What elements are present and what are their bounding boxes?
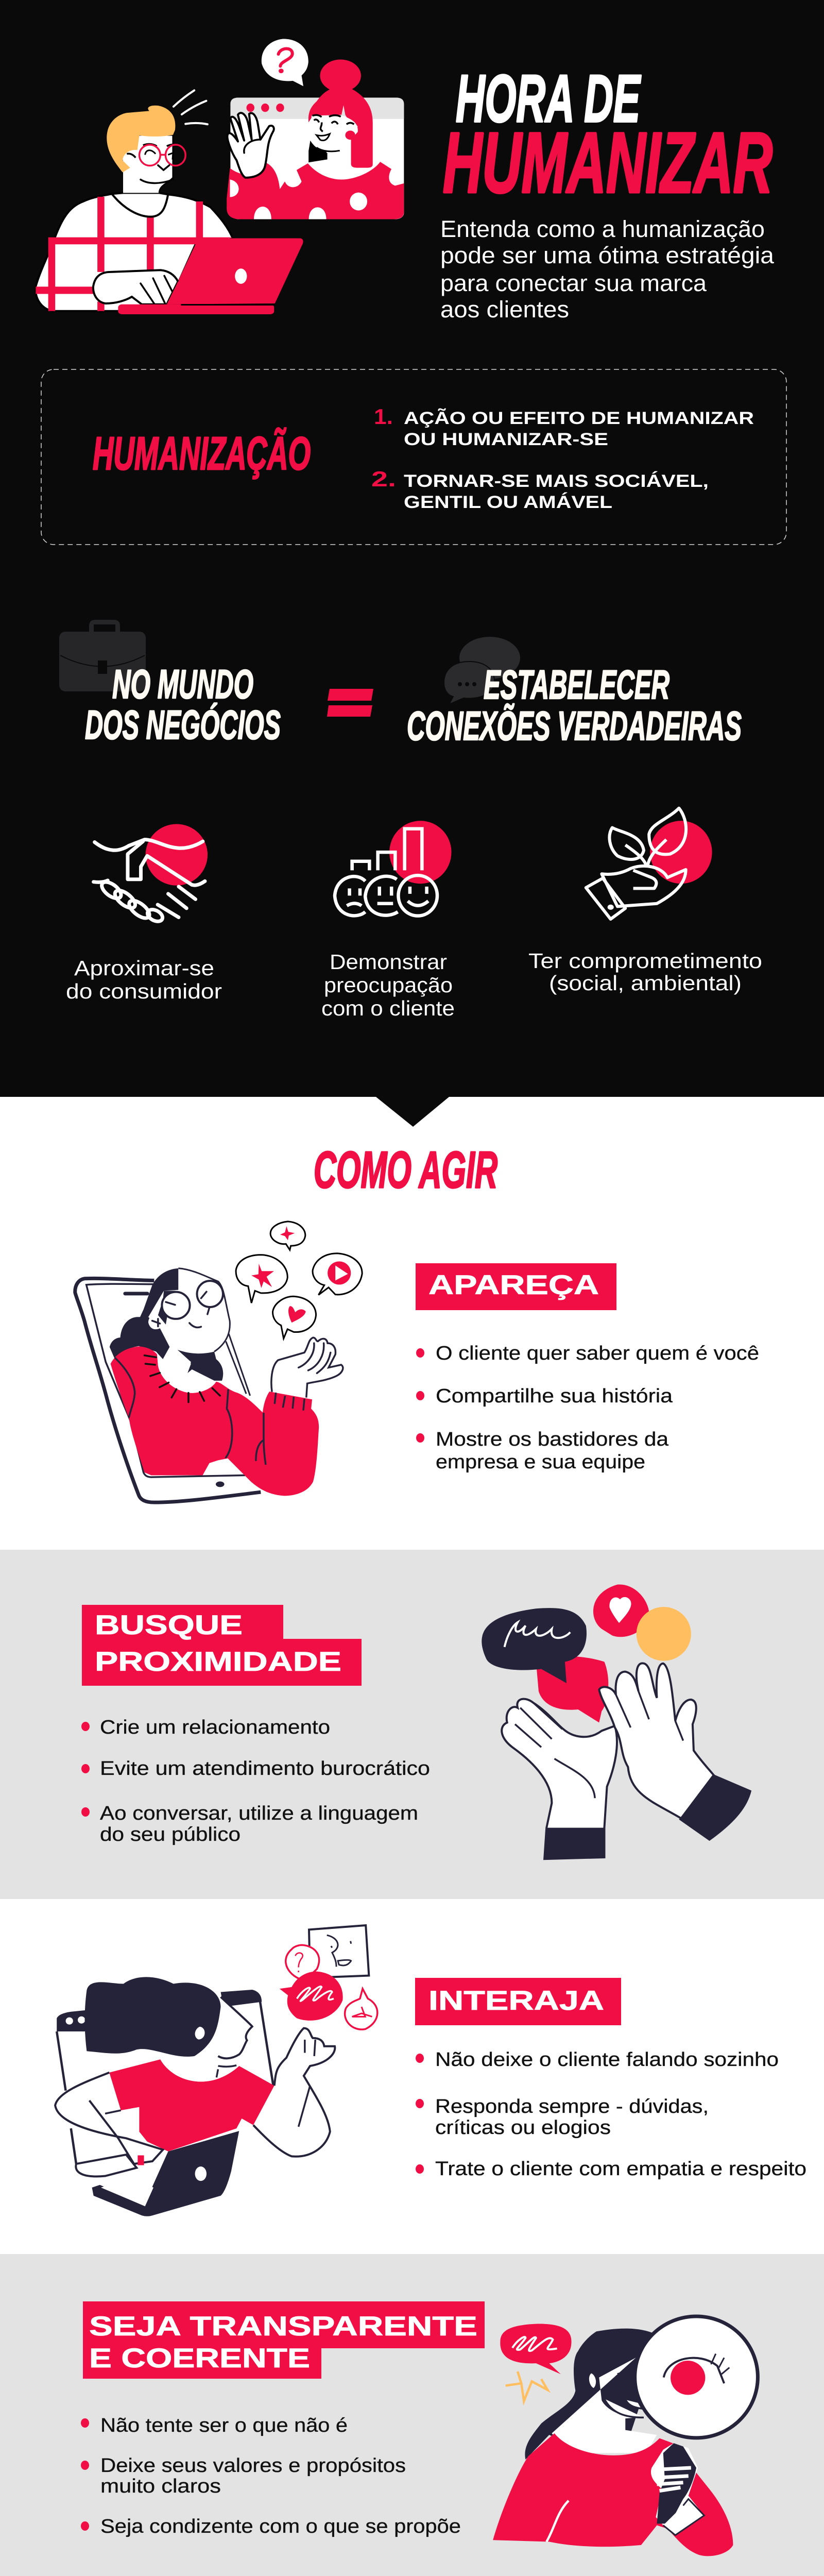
list: seja transparente bullets: Seja condizente com o que se propõe bbox=[100, 2516, 461, 2537]
list: apareça bullets: Mostre os bastidores da bbox=[436, 1429, 669, 1450]
list: apareça bullets: O cliente quer saber quem é você bbox=[436, 1343, 759, 1364]
label: ter comprometimento: (social, ambiental) bbox=[549, 971, 742, 995]
title: hora de humanizar bbox=[443, 61, 772, 211]
badge: apareça bbox=[416, 1263, 616, 1310]
subtitle text: pode ser uma ótima estratégia bbox=[440, 242, 775, 268]
icon: equals sign bbox=[327, 689, 373, 717]
list: interaja bullets: críticas ou elogios bbox=[435, 2117, 611, 2139]
label: aproximar-se do consumidor: do consumidor bbox=[66, 979, 222, 1003]
badge: busque proximidade: PROXIMIDADE bbox=[95, 1647, 341, 1677]
panel: definition of humanização: GENTIL OU AMÁVEL bbox=[404, 493, 612, 512]
icon: handshake bbox=[94, 824, 208, 923]
label: aproximar-se do consumidor bbox=[66, 956, 222, 1003]
badge: seja transparente e coerente: E COERENTE bbox=[89, 2343, 310, 2374]
list: interaja bullets: Responda sempre - dúvidas, bbox=[435, 2096, 709, 2117]
subtitle text: para conectar sua marca bbox=[440, 270, 707, 296]
icon: speech bubbles (faint) bbox=[444, 637, 520, 704]
panel: interaja bbox=[55, 1925, 806, 2216]
badge: busque proximidade bbox=[82, 1605, 362, 1686]
panel: hero and definition (black) bbox=[0, 0, 824, 1127]
list: busque proximidade bullets: do seu público bbox=[100, 1824, 241, 1845]
list: busque proximidade bullets: Crie um relacionamento bbox=[100, 1717, 330, 1738]
subtitle text bbox=[440, 216, 775, 323]
badge: apareça: APAREÇA bbox=[428, 1270, 599, 1300]
icon: hand holding plant bbox=[586, 808, 712, 919]
panel: definition of humanização: HUMANIZAÇÃO bbox=[93, 428, 311, 480]
label: demonstrar preocupação: com o cliente bbox=[321, 996, 455, 1020]
list: apareça bullets: Compartilhe sua história bbox=[436, 1385, 673, 1407]
heading: no mundo dos negócios: DOS NEGÓCIOS bbox=[85, 702, 281, 748]
badge: interaja: INTERAJA bbox=[428, 1986, 604, 2016]
illustration: woman leaving phone bbox=[75, 1222, 362, 1502]
subtitle text: aos clientes bbox=[440, 296, 569, 323]
list: busque proximidade bullets bbox=[81, 1717, 430, 1845]
panel: busque proximidade bbox=[0, 1550, 824, 1899]
heading: no mundo dos negócios bbox=[85, 661, 281, 748]
label: demonstrar preocupação bbox=[321, 950, 455, 1020]
list: seja transparente bullets: muito claros bbox=[100, 2476, 221, 2497]
heading: estabelecer conexões verdadeiras bbox=[407, 662, 742, 749]
list: seja transparente bullets: Não tente ser o que não é bbox=[100, 2415, 348, 2436]
list: interaja bullets bbox=[416, 2049, 806, 2180]
list: apareça bullets bbox=[416, 1343, 759, 1473]
label: demonstrar preocupação: Demonstrar bbox=[330, 950, 447, 974]
title: hora de humanizar: HORA DE bbox=[456, 61, 641, 136]
label: ter comprometimento bbox=[528, 949, 762, 995]
illustration: high five hands with speech bubbles bbox=[482, 1584, 751, 1859]
heading: no mundo dos negócios: NO MUNDO bbox=[112, 661, 253, 707]
badge: seja transparente e coerente: SEJA TRANSPARENTE bbox=[89, 2311, 477, 2342]
panel: apareça bbox=[75, 1222, 759, 1502]
icon: satisfaction faces and bars bbox=[335, 821, 452, 916]
list: interaja bullets: Trate o cliente com empatia e respeito bbox=[435, 2158, 806, 2180]
panel: definition of humanização bbox=[41, 369, 786, 545]
list: busque proximidade bullets: Ao conversar, utilize a linguagem bbox=[100, 1803, 418, 1824]
panel: definition of humanização: AÇÃO OU EFEITO DE HUMANIZAR bbox=[404, 409, 754, 428]
panel: definition of humanização: 1. bbox=[374, 404, 393, 429]
panel: definition of humanização: TORNAR-SE MAIS SOCIÁVEL, bbox=[404, 471, 709, 491]
badge: seja transparente e coerente bbox=[83, 2301, 485, 2379]
label: demonstrar preocupação: preocupação bbox=[324, 973, 453, 997]
label: aproximar-se do consumidor: Aproximar-se bbox=[74, 956, 214, 980]
panel: definition of humanização: 2. bbox=[371, 467, 396, 491]
illustration: man on video call bbox=[36, 39, 404, 314]
panel: como agir heading: COMO AGIR bbox=[314, 1141, 497, 1199]
illustration: woman gesturing at laptop bbox=[55, 1925, 377, 2216]
heading: estabelecer conexões verdadeiras: ESTABELECER bbox=[484, 662, 670, 707]
list: busque proximidade bullets: Evite um atendimento burocrático bbox=[100, 1758, 430, 1780]
list: interaja bullets: Não deixe o cliente falando sozinho bbox=[435, 2049, 779, 2071]
label: ter comprometimento: Ter comprometimento bbox=[528, 949, 762, 973]
badge: busque proximidade: BUSQUE bbox=[95, 1610, 243, 1640]
icon: briefcase (faint) bbox=[59, 620, 146, 691]
panel: seja transparente e coerente bbox=[0, 2254, 824, 2576]
list: apareça bullets: empresa e sua equipe bbox=[436, 1451, 645, 1473]
list: seja transparente bullets bbox=[81, 2415, 461, 2537]
badge: interaja bbox=[415, 1978, 621, 2025]
illustration: woman with megaphone bbox=[493, 2316, 758, 2556]
panel: definition of humanização: OU HUMANIZAR-SE bbox=[404, 430, 608, 449]
subtitle text: Entenda como a humanização bbox=[440, 216, 765, 242]
list: seja transparente bullets: Deixe seus valores e propósitos bbox=[100, 2455, 406, 2477]
